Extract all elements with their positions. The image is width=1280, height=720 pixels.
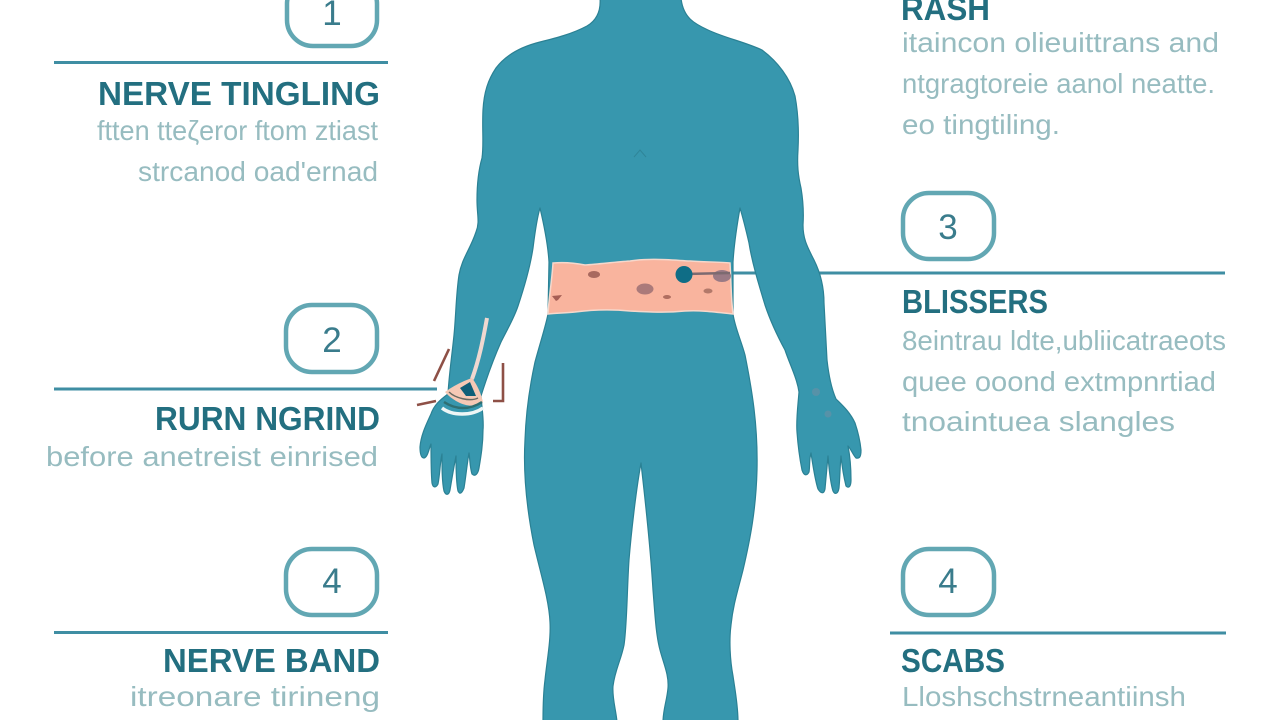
- description: rash: [902, 27, 1219, 140]
- description: nerve tingling: strcanod oad'ernad: [138, 156, 378, 187]
- callout 1: nerve tingling: [54, 0, 388, 187]
- wrist injury detail: [417, 318, 503, 414]
- description: scabs: Lloshschstrneantiinsh: [902, 681, 1186, 712]
- description: blisters: 8eintrau ldte,ubliicatraeots: [902, 325, 1226, 356]
- heading: nerve tingling: NERVE TINGLING: [98, 75, 380, 112]
- description: burning: before anetreist einrised: [46, 441, 378, 472]
- callout: rash: [901, 0, 1219, 140]
- badge 4 right: 4: [938, 562, 958, 601]
- description: blisters: quee ooond extmpnrtiad: [902, 366, 1216, 397]
- description: blisters: tnoaintuea slangles: [902, 406, 1175, 437]
- description: rash: itaincon olieuittrans and: [902, 27, 1219, 58]
- description: blisters: [902, 325, 1226, 437]
- callout 3: blisters: [902, 193, 1226, 437]
- badge 3: [903, 193, 994, 259]
- heading: burning: RURN NGRIND: [155, 400, 380, 437]
- badge 4 right: [903, 549, 994, 615]
- description: rash: ntgragtoreie aanol neatte.: [902, 68, 1215, 99]
- badge 2: 2: [322, 321, 342, 360]
- callout 2: burning: [46, 305, 437, 472]
- human body silhouette: [420, 0, 861, 720]
- faint marks on right hand: [812, 388, 832, 418]
- badge 2: [286, 305, 377, 372]
- description: nerve tingling: ftten tteζeror ftom ztiast: [97, 115, 378, 146]
- rash band on waist: [548, 259, 733, 314]
- badge 3: 3: [938, 208, 958, 247]
- heading: nerve band: NERVE BAND: [163, 642, 380, 679]
- blister marker: [676, 266, 730, 283]
- chest mark: [634, 150, 646, 157]
- badge 4 left: [286, 549, 377, 615]
- description: nerve tingling: [97, 115, 378, 187]
- rash spots: [552, 270, 731, 301]
- description: nerve band: itreonare tirineng: [130, 681, 380, 712]
- badge 1: [287, 0, 377, 46]
- callout line: blisters to band: [725, 272, 1225, 274]
- callout 4 right: scabs: [890, 549, 1226, 712]
- callout 4 left: nerve band: [54, 549, 388, 712]
- badge 4 left: 4: [322, 562, 342, 601]
- description: rash: eo tingtiling.: [902, 109, 1060, 140]
- heading: blisters: BLISSERS: [902, 283, 1048, 320]
- heading: scabs: SCABS: [901, 642, 1005, 679]
